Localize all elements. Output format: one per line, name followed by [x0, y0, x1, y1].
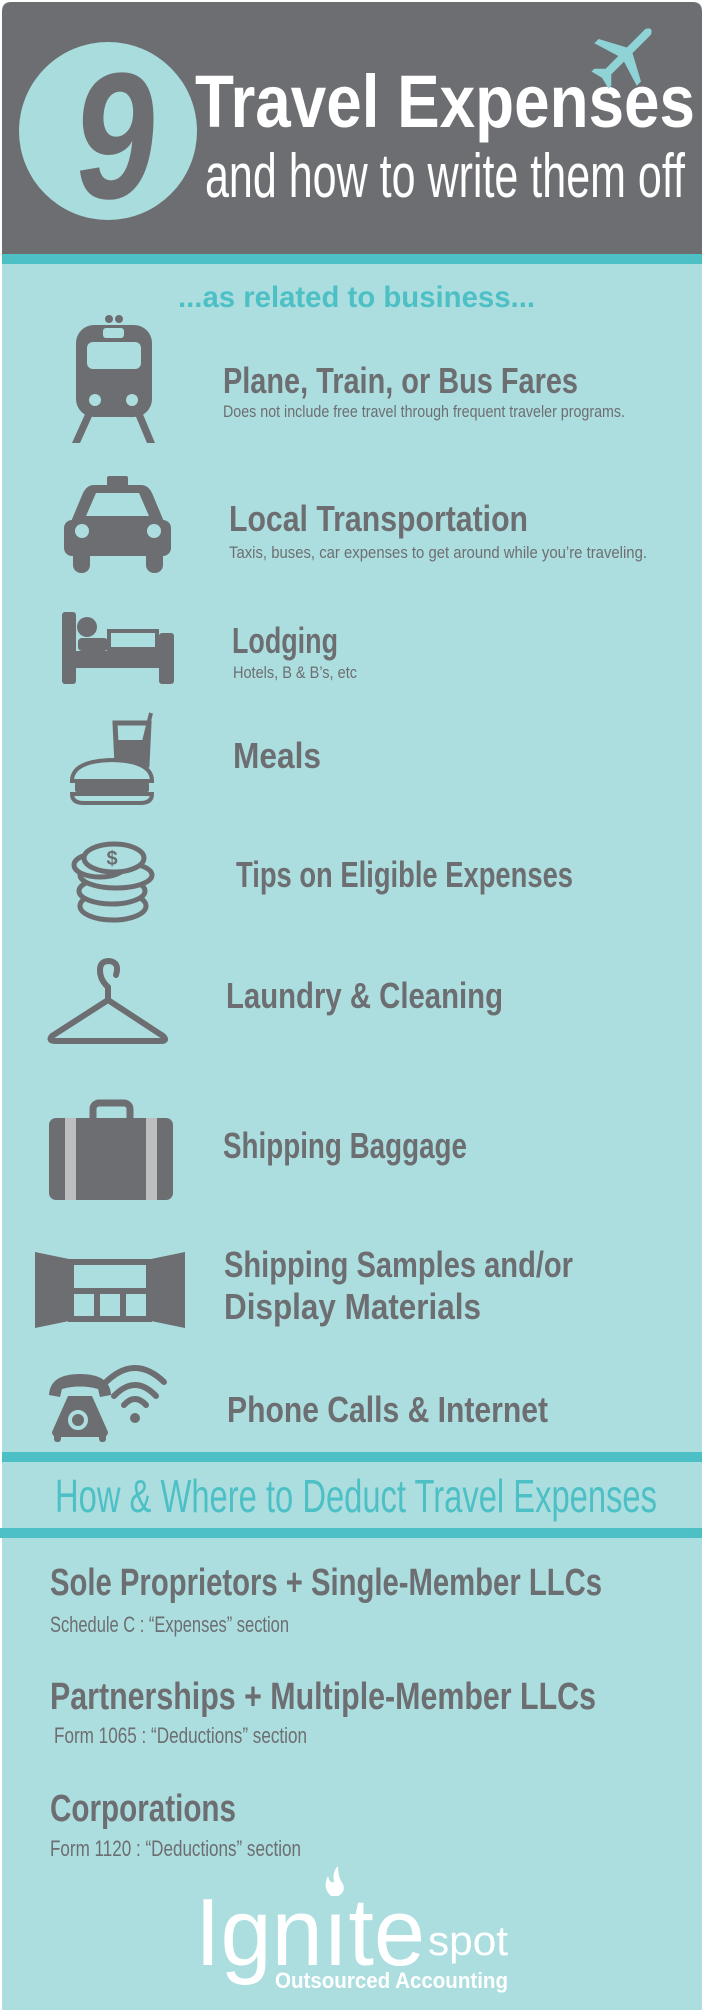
deduction: corporations: Corporations [50, 1788, 236, 1830]
deduction: corporations [50, 1788, 301, 1861]
title: Meals [233, 735, 321, 776]
icon: display board [35, 1252, 185, 1328]
item 5: tips [74, 844, 573, 920]
header band [2, 2, 702, 264]
item 9: phone [49, 1368, 548, 1442]
title: Local Transportation [229, 498, 528, 539]
deduction: partnerships [50, 1676, 596, 1748]
icon: train [72, 315, 155, 443]
icon: burger and drink [72, 713, 152, 803]
logo: spot [428, 1917, 508, 1964]
header number circle: 9 [67, 36, 167, 237]
title [224, 1244, 573, 1327]
item 1: fares [72, 315, 625, 443]
logo: Outsourced Accounting [275, 1968, 508, 1993]
icon: phone and wifi [49, 1368, 164, 1442]
icon: coins: $ [106, 848, 118, 870]
description: Does not include free travel through frequent traveler programs. [223, 402, 625, 421]
section divider band [0, 1452, 702, 1538]
title: Phone Calls & Internet [227, 1389, 548, 1430]
section intro: ...as related to business... [178, 281, 535, 314]
deduction: sole proprietors: Schedule C : “Expenses” section [50, 1612, 289, 1637]
item 3: lodging [62, 612, 357, 684]
logo: Ignıte [195, 1879, 425, 1986]
title: Laundry & Cleaning [226, 975, 503, 1016]
item 6: laundry [51, 961, 503, 1041]
icon: suitcase [49, 1103, 173, 1200]
description: Hotels, B & B’s, etc [233, 663, 357, 682]
title: Shipping Baggage [223, 1125, 467, 1166]
item 8: samples [35, 1244, 573, 1328]
icon: bed [62, 612, 174, 684]
icon: airplane [579, 8, 672, 101]
title: Lodging [232, 620, 338, 661]
title: Tips on Eligible Expenses [236, 854, 573, 895]
logo [195, 1866, 508, 1993]
item 4: meals [72, 713, 321, 803]
title: Plane, Train, or Bus Fares [223, 360, 578, 401]
title: Display Materials [224, 1286, 481, 1327]
item 2: local transportation [64, 476, 647, 573]
header number circle [19, 36, 197, 237]
deduction: partnerships: Form 1065 : “Deductions” section [54, 1723, 307, 1748]
description: Taxis, buses, car expenses to get around while you’re traveling. [229, 543, 647, 562]
deduction: corporations: Form 1120 : “Deductions” section [50, 1836, 301, 1861]
icon: hanger [51, 961, 165, 1041]
item 7: baggage [49, 1103, 467, 1200]
deduction: sole proprietors [50, 1562, 602, 1637]
title: Shipping Samples and/or [224, 1244, 573, 1285]
icon: coins [74, 844, 152, 920]
icon: taxi [64, 476, 171, 573]
